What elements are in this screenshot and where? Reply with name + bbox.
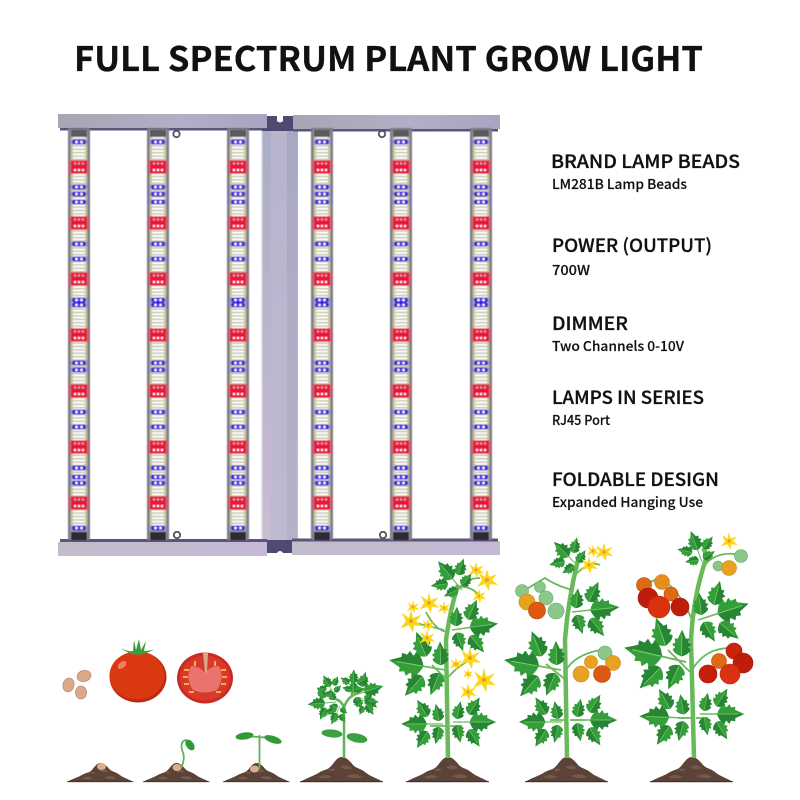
top hinge bbox=[262, 116, 293, 131]
spec: dimmer: DIMMER bbox=[552, 310, 628, 336]
spec: foldable design: Expanded Hanging Use bbox=[552, 491, 703, 511]
spec: brand lamp beads: LM281B Lamp Beads bbox=[552, 173, 687, 193]
spec: brand lamp beads bbox=[551, 148, 740, 193]
fruit bbox=[516, 582, 620, 682]
LED bar 4 bbox=[311, 128, 333, 540]
bottom rail left bbox=[58, 539, 267, 556]
spec: brand lamp beads: BRAND LAMP BEADS bbox=[551, 148, 740, 174]
LED bar 1 bbox=[68, 128, 90, 540]
spec: power: POWER (OUTPUT) bbox=[552, 232, 712, 258]
top rail right bbox=[293, 115, 500, 132]
stage 2: sprout bbox=[143, 738, 209, 782]
whole tomato bbox=[110, 639, 166, 702]
halved tomato bbox=[177, 652, 233, 704]
spec: dimmer bbox=[552, 310, 685, 355]
spec: dimmer: Two Channels 0-10V bbox=[552, 335, 685, 355]
spec: power bbox=[552, 232, 712, 279]
stage 1: seed in soil bbox=[67, 763, 133, 782]
LED bar 5 bbox=[390, 128, 412, 540]
seeds bbox=[61, 669, 92, 699]
title: FULL SPECTRUM PLANT GROW LIGHT bbox=[74, 32, 703, 81]
spec: lamps in series: RJ45 Port bbox=[552, 409, 611, 429]
stage 4: young plant bbox=[300, 665, 390, 782]
fruit bbox=[636, 550, 753, 684]
grow light fixture bbox=[58, 114, 500, 556]
spec: foldable design: FOLDABLE DESIGN bbox=[552, 466, 719, 492]
bottom rail right bbox=[292, 538, 500, 555]
spec: lamps in series: LAMPS IN SERIES bbox=[552, 384, 704, 410]
flowers bbox=[400, 562, 498, 701]
LED bar 2 bbox=[147, 128, 169, 540]
spec: power: 700W bbox=[552, 259, 590, 279]
spec: lamps in series bbox=[552, 384, 704, 429]
stage 6: green and ripening fruit plant bbox=[497, 526, 623, 782]
LED bar 6 bbox=[470, 128, 492, 540]
spec: foldable design bbox=[552, 466, 719, 511]
LED bar 3 bbox=[227, 128, 249, 540]
stage 7: ripe fruit plant bbox=[615, 524, 760, 782]
center spine panel bbox=[261, 128, 298, 542]
bottom hinge bbox=[267, 540, 292, 553]
stage 5: flowering plant bbox=[383, 545, 502, 782]
stage 3: seedling bbox=[223, 731, 289, 782]
top rail left bbox=[58, 114, 267, 130]
hanging rings bbox=[173, 131, 386, 538]
